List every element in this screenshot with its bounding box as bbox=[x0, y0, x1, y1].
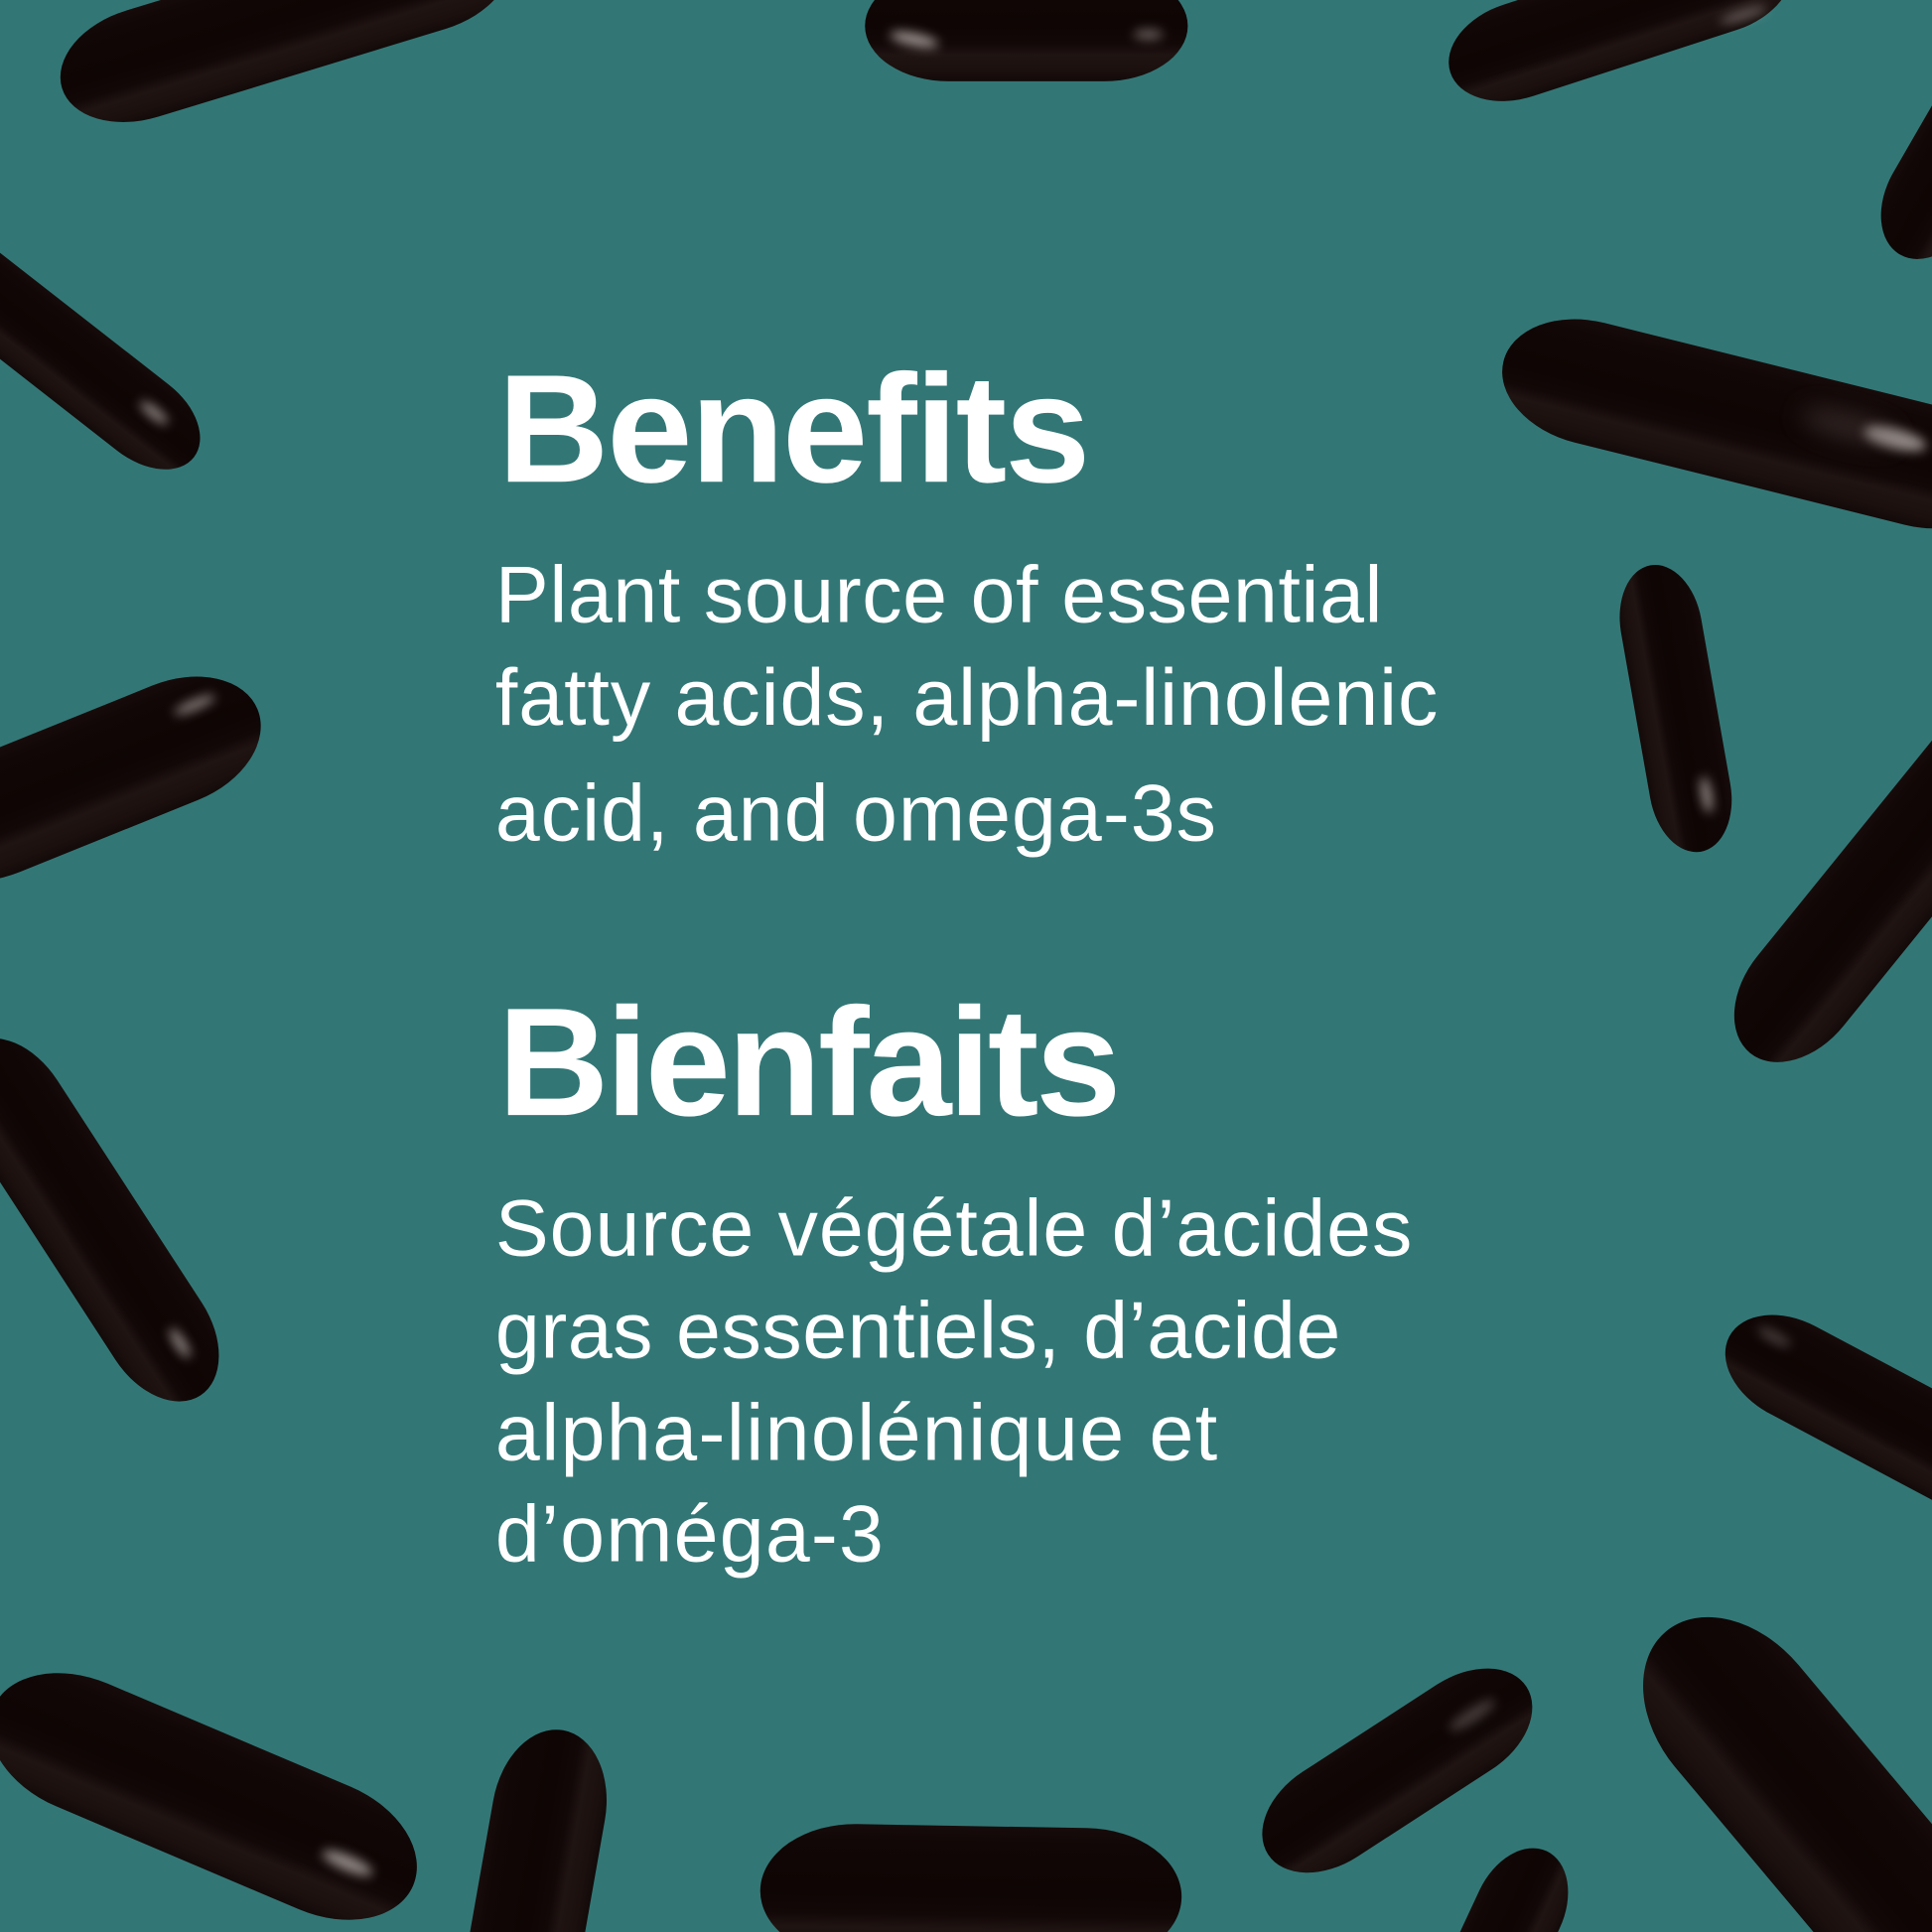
text block: French benefits: Source végétale d’acides bbox=[495, 1184, 1412, 1274]
capsule: left middle bbox=[0, 652, 281, 905]
text block: French benefits: gras essentiels, d’acide bbox=[495, 1287, 1340, 1376]
capsule: top right bbox=[1436, 0, 1805, 118]
capsule: right lower bbox=[1707, 1293, 1932, 1554]
text block: English benefits: acid, and omega-3s bbox=[495, 768, 1216, 858]
text block: French benefits: alpha-linolénique et bbox=[495, 1389, 1217, 1478]
capsule: left lower bbox=[0, 1016, 243, 1424]
text block: French benefits bbox=[495, 1184, 1412, 1579]
text block: French benefits: d’oméga-3 bbox=[495, 1489, 884, 1579]
capsule: large bottom right bbox=[1604, 1580, 1932, 1932]
text block: English benefits: fatty acids, alpha-linolenic bbox=[495, 653, 1438, 743]
capsule: bottom left large bbox=[0, 1646, 439, 1932]
heading: Benefits: Benefits bbox=[497, 343, 1090, 514]
capsule: top centre bbox=[865, 0, 1187, 81]
capsule: upper right edge bbox=[1860, 18, 1932, 278]
capsule: right middle bbox=[1707, 654, 1932, 1088]
capsule: large right bbox=[1488, 302, 1932, 546]
capsule: left upper bbox=[0, 211, 219, 490]
capsule: small right bbox=[1610, 558, 1741, 859]
capsule: bottom centre right bbox=[1241, 1644, 1554, 1897]
heading: Bienfaits: Bienfaits bbox=[497, 976, 1121, 1148]
text block: English benefits: Plant source of essential bbox=[495, 551, 1382, 640]
capsule: bottom narrow bbox=[443, 1721, 619, 1932]
text block: English benefits bbox=[495, 551, 1438, 858]
capsule: bottom centre bbox=[759, 1823, 1182, 1932]
capsule: tiny bottom right bbox=[1402, 1833, 1587, 1932]
capsule: top left bbox=[46, 0, 526, 141]
